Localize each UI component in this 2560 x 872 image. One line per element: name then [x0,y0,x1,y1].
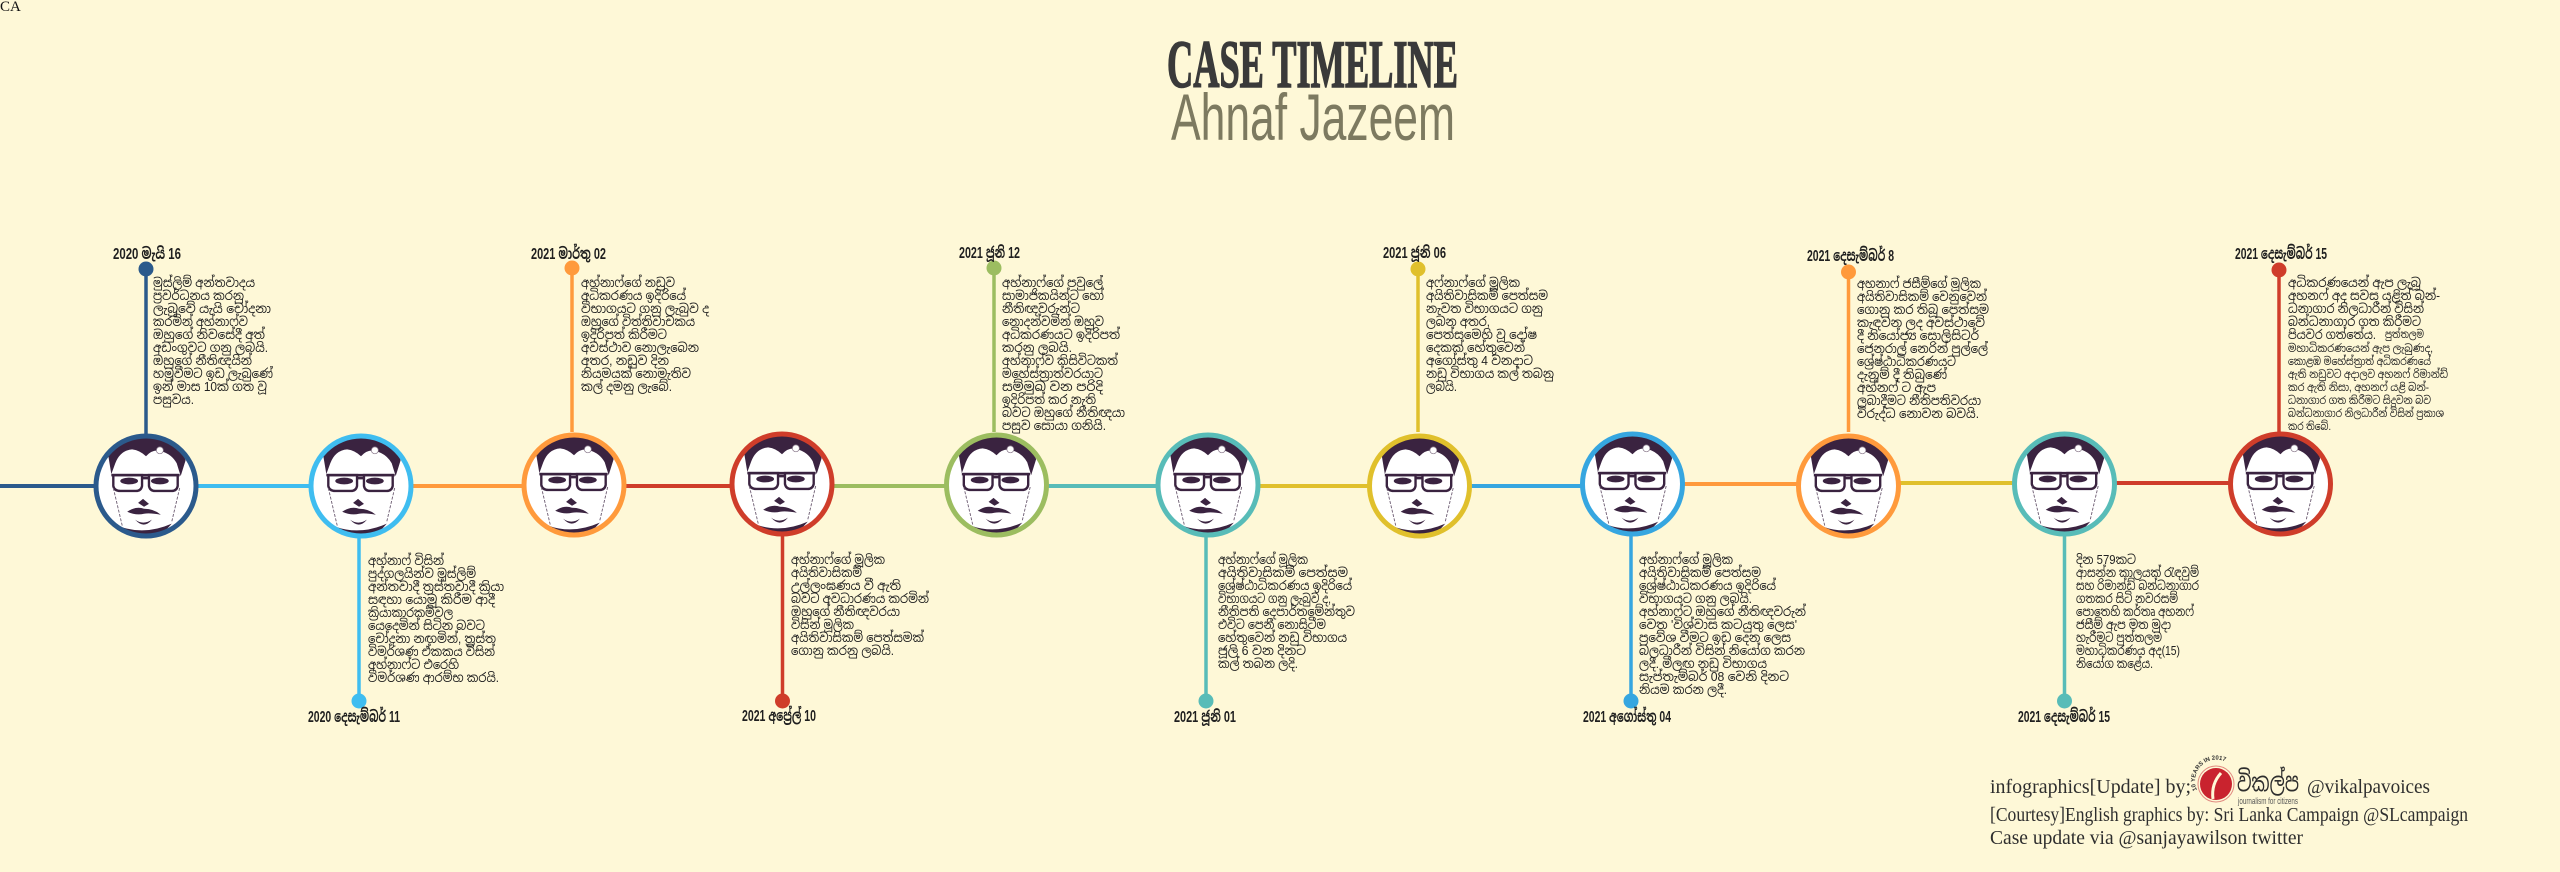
stem [781,536,784,701]
stem [570,268,574,432]
description: කැඳවන ලද අවස්ථාවේ [1857,314,1985,330]
date: 2021 අප්‍රේල් 10 [742,706,816,725]
portrait [732,434,832,534]
description: බන්ධනාගාර ගත කිරීමට [2288,313,2421,329]
event 2: 2020 December 11 [308,436,504,726]
description: බලධාරීන් විසින් නියෝග කරන [1639,642,1805,658]
dot [564,260,580,276]
description: කල් දමනු ලැබේ. [581,378,672,394]
description: අහ්නාෆ්ගේ මූලික [1218,551,1308,567]
description: අහනෆ් අද සවස යළිත් බන්- [2288,287,2440,303]
description: පසුව සොයා ගනියි. [1002,419,1106,433]
description: බවට ඔහුගේ නීතිඥයා [1002,404,1125,420]
description: අෆ්නාෆ්ගේ මූලික [1426,274,1520,290]
portrait [2014,434,2114,534]
description: ඔහුගේ නීතිඥයින් [153,352,253,368]
description: අධිකරණයට ඉදිරිපත් [1002,326,1120,342]
dot [1410,262,1426,276]
description: මහාධිකරණයෙන් ඇප ලැබුණද, [2288,341,2433,355]
dot [2057,694,2072,708]
date: 2020 දෙසැම්බර් 11 [308,707,400,726]
dot [138,262,154,276]
subtitle: Ahnaf Jazeem [1171,80,1455,154]
description: ප්‍රවේශ වීමට ඉඩ දෙන ලෙස [1639,630,1791,645]
date: 2021 දෙසැම්බර් 15 [2235,244,2327,263]
description: හමුවීමට ඉඩ ලැබුණේ [153,366,274,381]
description: විභාගයට ගනු ලබයි. [1639,591,1752,606]
description [791,551,930,658]
description: අහ්නාෆ්ගේ නඩුව [581,274,675,290]
description: පුත්තලම [2385,327,2424,341]
description: අහ්නාෆ්ට එරෙහි [368,656,459,672]
description: පෙත්සමෙහි වූ දෝෂ [1426,326,1537,342]
logo: Vikalpa: 10 YEARS IN 2017 [2190,755,2226,791]
description: එවිට පෙනී නොසිටීම [1218,617,1326,632]
portrait [946,435,1046,535]
description: ඇති නඩුවට අදාලව අහනෆ් රිමාන්ඩ් [2288,367,2448,381]
description: අහ්නාෆ්ගේ මූලික [791,551,885,567]
credits [1990,755,2468,849]
description: දී නියෝජ්‍ය සොලිසිටර් [1857,327,1979,343]
stem [1204,536,1208,701]
description: ගතකර සිටි නවරසම් [2076,591,2178,606]
description [1639,551,1807,697]
description: ආසන්න කාලයක් රැඳවුම් [2076,564,2199,580]
date: 2021 ජූනි 12 [959,244,1020,262]
description [1218,551,1355,671]
portrait [1582,434,1682,534]
date: 2021 ජූනි 06 [1383,244,1446,262]
description [2076,552,2199,671]
description: අගෝස්තු 4 වනදාට [1426,352,1533,368]
description: ඉන් මාස 10ක් ගත වූ [153,378,267,394]
logo: Vikalpa: journalism for citizens [2237,796,2298,806]
description: මුස්ලිම් අන්තවාදය [153,274,255,290]
description: නියමයක් නොමැතිව [581,365,691,381]
portrait [311,436,411,536]
description: අහ්නාෆ්ට ඔහුගේ නීතිඥවරුන් [1639,603,1807,619]
description: ඉදිරිපත් කිරීමට [581,326,667,342]
description: ලදී. මීලඟ නඩු විභාගය [1639,656,1767,671]
description: ලබන අතර, [1426,315,1490,329]
description [1426,274,1554,394]
description: නියම කරන ලදී. [1639,682,1727,697]
description: අවස්ථාව නොලැබෙන [581,339,699,355]
description: කල් තබන ලදි. [1218,655,1298,671]
description: අතර, නඩුව දින [581,353,669,368]
description [368,552,504,685]
dot [2272,262,2286,278]
date: 2021 ජූනි 01 [1174,708,1236,726]
description: හැරීමට පුත්තලම [2076,629,2162,645]
stem [992,268,996,432]
date: 2021 දෙසැම්බර් 15 [2018,707,2110,726]
stem [357,538,361,701]
description: මහාධිකරණය අද(15) [2076,643,2180,658]
infographics credit: infographics[Update] by; [1990,776,2191,798]
dot [775,694,790,708]
description: සහ රිමාන්ඩ් බන්ධනාගාර [2076,577,2199,593]
description: ප්‍රවර්ධනය කරනු [153,287,244,303]
date: 2020 මැයි 16 [113,245,181,263]
description: දින 579කට [2076,552,2136,567]
description: බන්ධනාගාර නිලධාරීන් විසින් ප්‍රකාශ [2288,406,2444,420]
description: විභාගයට ගනු ලැබුව ද, [1218,591,1331,606]
description: නීතිඥවරුන්ට [1002,300,1080,316]
stem [1416,269,1420,432]
event 9: 2021 December 8 [1798,246,1989,536]
description: මහේස්ත්‍රාත්වරයාට [1002,365,1103,381]
description: ගොනු කරනු ලබයි. [791,644,894,658]
description: ලබාදීමට නීතිපතිවරයා [1857,393,1981,408]
description: ඉදිරිපත් කර නැති [1002,391,1096,407]
event 10: 2021 December 15 (release order) [2014,434,2199,726]
event 7: 2021 June 06 [1370,244,1554,536]
logo: Vikalpa [2190,755,2299,806]
description: වෙත 'විශ්වාස කටයුතු ලෙස' [1639,616,1797,632]
description: අහ්නාෆ්ගේ පවුලේ [1002,274,1103,290]
logo: Vikalpa: විකල්ප [2237,766,2299,797]
description: අයිතිවාසිකම් [791,565,862,580]
description: හේතුවෙන් නඩු විභාගය [1218,629,1347,645]
description: විභාගයට ගනු ලැබුව ද [581,301,710,316]
description: පියවර ගත්තේය. [2288,326,2376,342]
description: පුද්ගලයින්ව මුස්ලිම් [368,565,476,581]
description: අන්තවාදී ත්‍රස්තවාදී ක්‍රියා [368,578,504,594]
description: උල්ලංඝණය වී ඇති [791,577,901,593]
description [2288,274,2448,433]
description: නොදන්වමින් ඔහුව [1002,313,1104,329]
description: කරනු ලබයි. [1002,341,1072,355]
dot [1841,264,1856,280]
portrait [524,435,624,535]
description: ශ්‍රේෂ්ඨාධිකරණය ඉදිරියේ [1639,577,1777,593]
description: විමර්ශණ ආරම්භ කරයි. [368,669,499,685]
description: යෙදෙමින් සිටින බවට [368,617,485,633]
description: අධිකරණයෙන් ඇප ලැබූ [2288,274,2421,290]
event 6: 2021 June 01 [1158,435,1355,726]
stem [144,269,148,434]
event 3: 2021 March 02 [524,244,710,535]
description: අයිතිවාසිකම් පෙත්සම [1639,564,1761,580]
description: දෙකක් හේතුවෙන් [1426,339,1526,355]
dot [1198,694,1214,708]
portrait [1158,435,1258,535]
description: බවට අවධාරණය කරමින් [791,590,930,606]
description [153,274,274,407]
description: අඩංගුවට ගනු ලබයි. [153,341,268,355]
description: ශ්‍රේෂ්ඨාධිකරණය ඉදිරියේ [1218,577,1353,593]
description: පොතෙහි කර්තෘ අහනෆ් [2076,603,2194,619]
portrait [2230,434,2330,534]
description: ඔහුගේ නිවසේදී අත් [153,326,265,342]
description: දැනුම් දී තිබුණේ [1857,367,1948,382]
event 1: 2020 May 16 [96,245,274,536]
date: 2021 මාර්තු 02 [531,244,606,263]
description: සඳහා යොමු කිරීම ආදී [368,592,496,607]
description: ලබයි. [1426,380,1457,394]
description: විමර්ශණ ඒකකය විසින් [368,643,496,659]
description [581,274,710,394]
stem [1629,536,1633,701]
dot [1624,694,1638,708]
description: නීතිපති දෙපාර්තමේන්තුව [1218,603,1355,619]
description: ධනාගාර නිලධාරීන් විසින් [2288,300,2425,316]
description: ඔහුගේ නීතිඥවරයා [791,603,900,619]
stem [2063,536,2066,701]
description: විසින් මූලික [791,616,854,632]
description: අහ්නාෆ්ව කිසිවිටකත් [1002,352,1118,368]
courtesy credit: [Courtesy]English graphics by: Sri Lanka Campaign @SLcampaign [1990,804,2468,826]
description: ලැබුවේ යැයි චෝදනා [153,300,271,316]
event 8: 2021 August 04 [1582,434,1807,726]
description: නියෝග කළේය. [2076,655,2153,671]
description: අයිතිවාසිකම් පෙත්සමක් [791,629,924,645]
description [1857,275,1989,421]
description: අධිකරණය ඉදිරියේ [581,287,687,303]
description: අහ්නාෆ් විසින් [368,552,445,568]
description: ජසීම් ඇප මත මුදා [2076,617,2171,632]
portrait [96,436,196,536]
description: ජෙනරාල් නෙරින් පුල්ලේ [1857,340,1988,356]
event 5: 2021 June 12 [946,244,1125,535]
description: සාමාජිකයින්ට හෝ [1002,287,1105,303]
description: ජූලි 6 වන දිනට [1218,643,1306,658]
portrait [1370,436,1470,536]
timeline connector lines [0,483,2235,486]
description: ශ්‍රේෂ්ඨාධිකරණයට [1857,353,1956,369]
description: ධනාගාර ගත කිරීමට සිදුවන බව [2288,394,2431,407]
description: කර ඇති නිසා, අහනෆ් යළි බන්- [2288,380,2429,394]
description: අයිතිවාසිකම් වෙනුවෙන් [1857,288,1988,304]
event 11: 2021 December 15 (released) [2230,244,2448,534]
event 4: 2021 April 10 [732,434,930,725]
description: අයිතිවාසිකම් පෙත්සම [1218,564,1348,580]
description: අහ්නාෆ්ගේ මූලික [1639,551,1733,567]
description: නැවත විභාගයට ගනු [1426,301,1543,316]
portrait [1798,436,1898,536]
date: 2021 අගෝස්තු 04 [1583,707,1671,726]
stem [2277,270,2281,432]
date: 2021 දෙසැම්බර් 8 [1807,246,1894,265]
description: විරුද්ධ නොවන බවයි. [1857,405,1979,421]
description: කොළඹ මහේස්ත්‍රාත් අධිකරණයේ [2288,354,2431,368]
stem [1847,272,1850,432]
description [1002,274,1125,433]
handle: @vikalpavoices [2307,776,2430,798]
description: චෝදනා නඟමින්, ත්‍රස්ත [368,630,496,646]
dot [352,694,366,708]
description: පසුවය. [153,393,194,407]
description: අහ්නෆ් ට ඇප [1857,379,1936,395]
description: කරමින් අහ්නාෆ්ව [153,313,248,329]
description: සම්මුඛ වන පරිදි [1002,379,1104,394]
description: ඔහුගේ විත්තිවාචකය [581,313,695,329]
title: CASE TIMELINE [1167,26,1458,102]
description: අහනාෆ් ජසීම්ගේ මූලික [1857,275,1981,291]
case update credit: Case update via @sanjayawilson twitter [1990,827,2303,849]
description: සැප්තැම්බර් 08 වෙනි දිනට [1639,668,1789,684]
description: නඩු විභාගය කල් තබනු [1426,365,1554,381]
description: ගොනු කර තිබූ පෙත්සම [1857,301,1989,317]
description: කර තිබේ. [2288,419,2331,433]
description: ක්‍රියාකාරකම්වල [368,605,453,620]
dot [986,260,1002,276]
description: අයිතිවාසිකම් පෙත්සම [1426,287,1548,303]
